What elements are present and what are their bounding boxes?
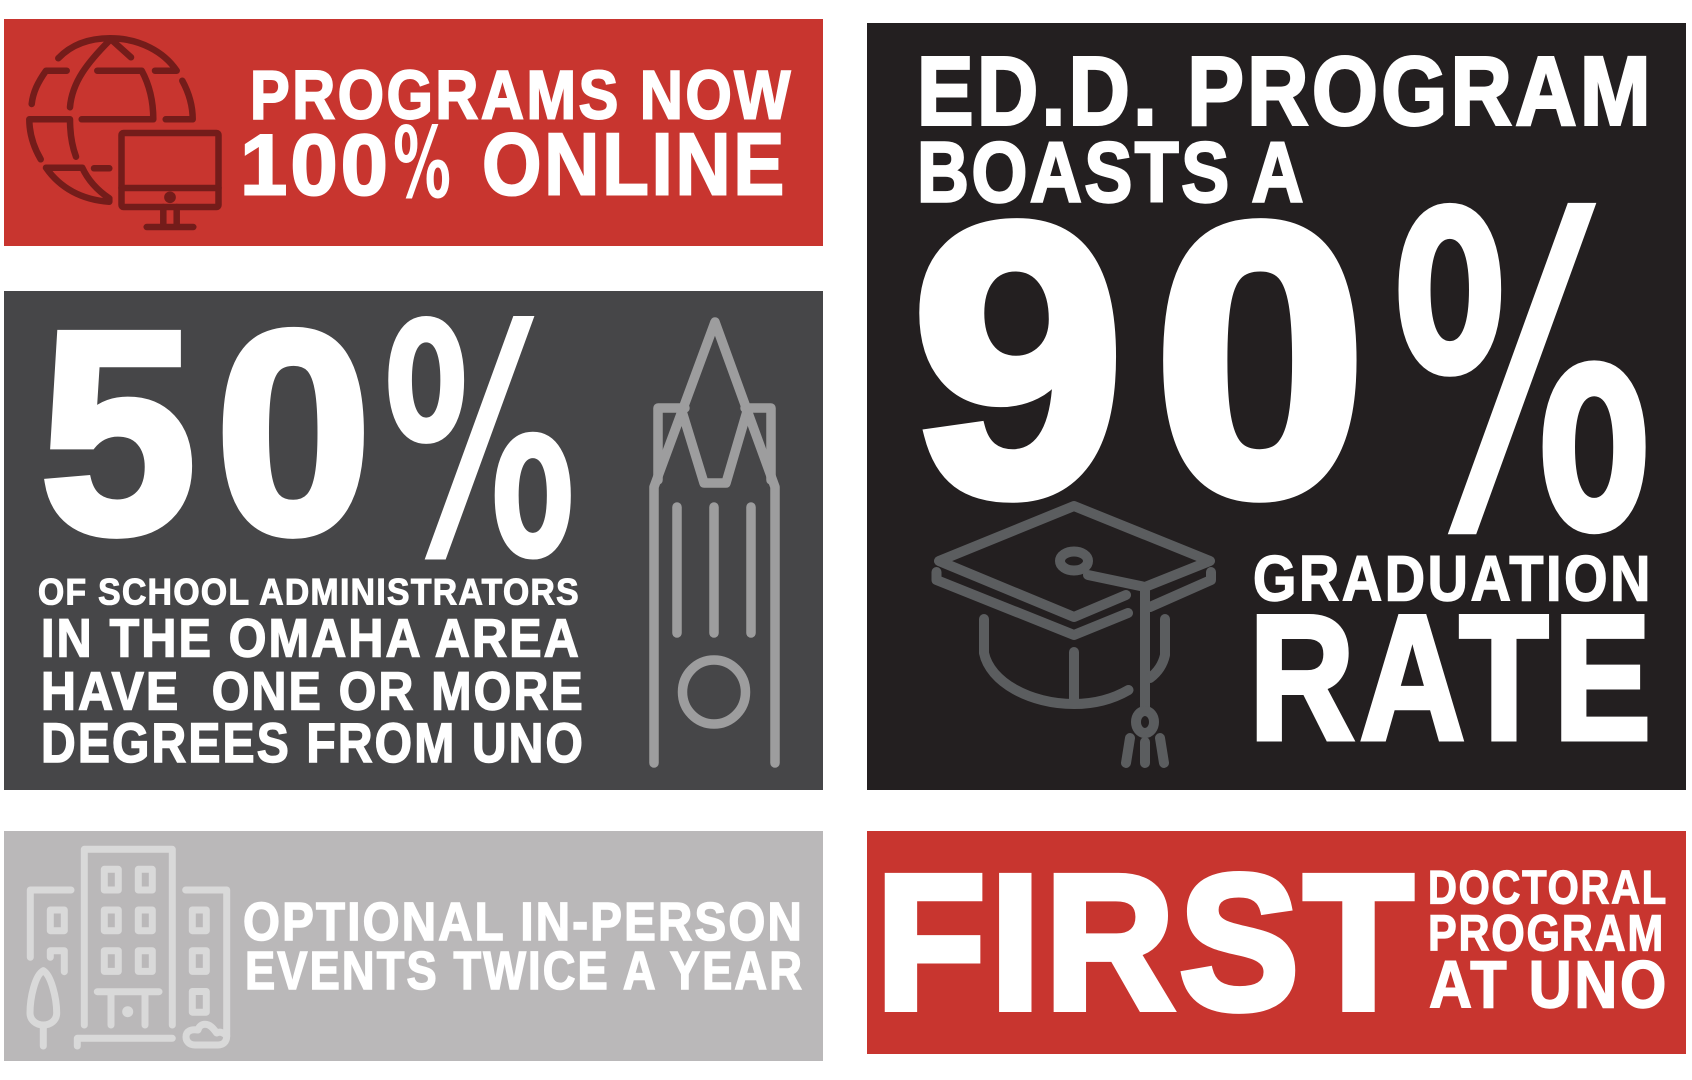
text: description of the 50 percent statistic — [38, 570, 585, 774]
text: optional in-person events twice a year: OPTIONAL IN-PERSON — [243, 892, 804, 952]
text: optional in-person events twice a year — [243, 892, 804, 1001]
heading: 100% online: % — [393, 107, 451, 221]
panel: 50% of school administrators — [4, 256, 823, 790]
icon: campus clock tower — [654, 322, 775, 763]
icon: graduation cap — [936, 506, 1211, 763]
statistic: 90 percent: 90 — [912, 144, 1396, 575]
heading: programs now: PROGRAMS NOW — [250, 56, 793, 134]
statistic: 50 percent: % — [382, 256, 577, 631]
heading: Ed.D. program boasts a: BOASTS A — [917, 126, 1306, 220]
text: doctoral program at UNO — [1428, 860, 1669, 1022]
text: description of the 50 percent statistic: HAVE ONE OR MORE — [41, 662, 585, 722]
heading: 100% online — [240, 107, 787, 221]
statistic: 50 percent — [40, 256, 577, 631]
panel: optional in-person events — [4, 831, 823, 1061]
panel: first doctoral program at UNO — [867, 831, 1686, 1054]
heading: 100% online: ONLINE — [482, 114, 787, 214]
text: doctoral program at UNO: AT UNO — [1429, 948, 1669, 1022]
panel: Ed.D. program 90% graduation rate — [867, 23, 1686, 790]
statistic: 90 percent — [912, 122, 1654, 632]
text: description of the 50 percent statistic: DEGREES FROM UNO — [41, 711, 585, 774]
panel: programs now 100% online — [4, 19, 823, 246]
icon: globe and monitor — [29, 38, 218, 227]
statistic: first: FIRST — [876, 834, 1418, 1050]
heading: 100% online: 100 — [240, 118, 391, 214]
text: description of the 50 percent statistic: OF SCHOOL ADMINISTRATORS — [38, 570, 580, 612]
text: optional in-person events twice a year: EVENTS TWICE A YEAR — [245, 941, 804, 1001]
statistic: 50 percent: 50 — [40, 272, 391, 594]
heading: Ed.D. program boasts a — [917, 36, 1654, 220]
text: description of the 50 percent statistic: IN THE OMAHA AREA — [41, 608, 581, 668]
icon: campus buildings — [30, 849, 227, 1046]
